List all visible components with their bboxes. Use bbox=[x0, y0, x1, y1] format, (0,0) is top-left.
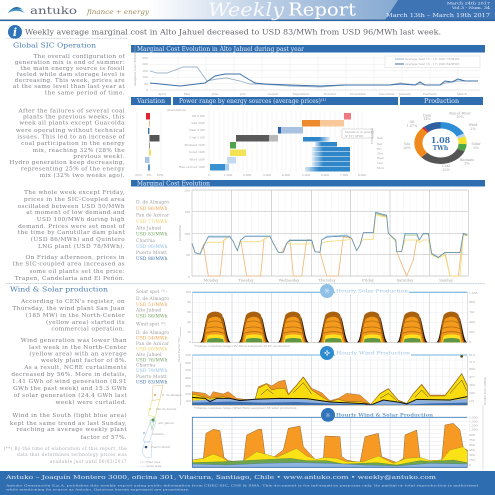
legend: plant factor by node: D. de Almagro bbox=[136, 297, 169, 302]
solar heading: Hourly Solar Production bbox=[336, 288, 408, 294]
range chart: 0 bbox=[208, 173, 210, 177]
line chart: August bbox=[267, 92, 279, 96]
panel: hourly solar production: 860 bbox=[469, 300, 475, 304]
panel: hourly wind production: 121 bbox=[469, 399, 475, 403]
legend: plant factor by node: D. de Almagro bbox=[136, 331, 169, 336]
text block: summary: fueled while dam storage level is bbox=[17, 72, 125, 78]
panel: marginal cost evolution weekly bbox=[131, 180, 485, 282]
text block: prices: the time by Canutillar dam plant bbox=[18, 230, 125, 236]
logo wordmark: antuko bbox=[30, 5, 77, 17]
panel: hourly solar production: 247 bbox=[469, 330, 475, 334]
line chart: nodal prices: Friday bbox=[362, 278, 375, 282]
range chart: Sun bbox=[377, 136, 383, 140]
panel: hourly wind production: 713 bbox=[469, 360, 475, 364]
range chart: 7,000 bbox=[340, 173, 348, 177]
text block: prices: (USD 86/MWh) and Quintero bbox=[31, 236, 125, 243]
text block: coal and hydro: plants the previous weeks, this bbox=[23, 114, 125, 120]
range chart: 1,000 bbox=[224, 173, 232, 177]
legend: plant factor by node: USD 54/MWh bbox=[136, 336, 168, 342]
chart legend bbox=[385, 56, 480, 68]
range chart: Tue bbox=[377, 161, 383, 165]
donut labels: 2% bbox=[470, 127, 476, 131]
panel: hourly wind production: 366 bbox=[469, 383, 475, 387]
headline with info icon bbox=[8, 25, 441, 39]
line chart: nodal prices bbox=[178, 188, 468, 282]
text block: friday: some oil plants set the price: bbox=[29, 269, 125, 275]
footer contact line: Antuko – Joaquín Montero 3000, oficina 301, Vitacura, Santiago, Chile • www.antuko.com • weekly@antuko.com bbox=[5, 474, 437, 481]
panel: hourly solar production: 100 bbox=[185, 290, 191, 294]
heading bar bbox=[131, 45, 485, 53]
range chart: Dam 3 kW bbox=[189, 128, 206, 132]
text block: prices: demand. Prices were set most of bbox=[18, 224, 125, 230]
panel: variation bbox=[131, 97, 171, 177]
callout bbox=[342, 129, 374, 138]
line chart: June bbox=[211, 92, 219, 96]
text block: summary: generation mix is end of summer: bbox=[15, 60, 125, 66]
line chart: nodal prices: USD/MWh bbox=[178, 225, 182, 241]
line chart: February bbox=[423, 92, 437, 96]
legend: nodes: Pan de Azúcar bbox=[136, 212, 170, 218]
line chart: December bbox=[379, 92, 395, 96]
text block: coal and hydro: mix, reaching 32% (28% the bbox=[33, 147, 125, 154]
range chart: Wind 1kW bbox=[189, 158, 206, 162]
text block: prices: at moment of low demand and bbox=[26, 210, 125, 216]
text block: coal and hydro: week all plants except Guacolda bbox=[19, 120, 125, 126]
donut labels: Biomass bbox=[460, 158, 474, 162]
panel: global SIC operation text bbox=[6, 38, 128, 282]
line chart: Marginal Cost (USD/MWh) bbox=[133, 45, 137, 86]
range chart: 4,000 bbox=[282, 173, 290, 177]
text block: summary bbox=[13, 54, 125, 96]
line chart: nodal prices: Tuesday bbox=[238, 278, 255, 282]
range chart: Solar 1kW bbox=[189, 150, 206, 154]
line chart: nodal prices: 0 bbox=[188, 275, 190, 279]
wind heading bbox=[320, 346, 411, 360]
line chart: nodal prices: 200 bbox=[184, 188, 190, 192]
footer disclaimer: Antuko Generación S.p.A. publishes this weekly report using public information from CDEC-SIC, CNE & SMA. This document is for information purposes only. Its partial or total reproduction is authorized bbox=[4, 484, 478, 488]
panel: hourly wind production: 600 bbox=[185, 361, 191, 365]
footer disclaimer: while mentioning its source as Antuko. Opinions herein expressed are proprietary. bbox=[6, 488, 189, 492]
range chart: Fri bbox=[377, 147, 382, 151]
text block: coal and hydro: previous week). bbox=[73, 153, 125, 160]
donut chart bbox=[418, 125, 463, 161]
text block: new plant: (185 MW) in the North-Center bbox=[26, 312, 125, 319]
chart legend: Average Year 16 - 17: USD 84/MWh bbox=[404, 62, 460, 66]
combined heading: ☼ bbox=[325, 412, 331, 420]
line chart: March bbox=[457, 92, 467, 96]
text block: new plant: Thursday, the wind plant San Juan bbox=[12, 306, 125, 312]
map of Chile by area: D. de Almagro bbox=[162, 393, 183, 397]
text block: curtailments: of solar generation (24.4 GWh last bbox=[14, 392, 127, 399]
legend: nodes: USD 86/MWh bbox=[136, 207, 168, 212]
tagline: finance + energy bbox=[86, 9, 149, 16]
heading bar bbox=[173, 97, 398, 105]
donut labels: Coal bbox=[442, 164, 450, 168]
line chart: nodal prices: Sunday bbox=[439, 278, 454, 282]
header banner bbox=[0, 0, 495, 21]
text block: new plant: commercial operation. bbox=[51, 326, 125, 332]
legend: plant factor by node: USD 51/MWh bbox=[136, 303, 168, 308]
line chart: nodal prices: Monday bbox=[204, 278, 219, 282]
panel: hourly solar production: 0 bbox=[469, 340, 471, 344]
line chart: 200 bbox=[142, 62, 148, 66]
text block: new plant: (yellow area) started its bbox=[46, 319, 125, 326]
map of Chile by area: Pan de Azúcar bbox=[156, 406, 177, 411]
text block: south wind: factor of 57%. bbox=[81, 435, 127, 441]
donut labels: Solar bbox=[471, 142, 481, 146]
callout: Variation of energy bbox=[344, 130, 374, 134]
panel: hourly wind and solar production: 150 bbox=[469, 458, 475, 462]
text block: curtailments: GWh the past week) and 15.3 GWh bbox=[13, 385, 127, 392]
range chart: Wed bbox=[377, 156, 384, 160]
panel: hourly wind and solar production: 450 bbox=[469, 448, 475, 452]
text block: coal and hydro: were operating without technical bbox=[16, 128, 125, 134]
line chart bbox=[133, 45, 480, 96]
legend: nodes bbox=[135, 200, 170, 262]
range chart: Biomass 1kW bbox=[185, 143, 206, 147]
legend: plant factor by node: Alto Jahuel bbox=[135, 308, 162, 314]
donut labels: 1.07% bbox=[407, 124, 418, 128]
report dates: March 13th – March 19th 2017 bbox=[386, 13, 491, 19]
text block: curtailments bbox=[11, 365, 127, 406]
range chart: Thu bbox=[377, 152, 383, 156]
line chart: November bbox=[350, 92, 366, 96]
legend: nodes: Puerto Montt bbox=[136, 251, 167, 256]
legend: nodes: USD 77/MWh bbox=[136, 220, 168, 225]
legend: nodes: Charrúa bbox=[136, 238, 155, 244]
range chart: 8,000 bbox=[358, 173, 366, 177]
text block: coal and hydro: Hydro generation keep decreasing, bbox=[9, 160, 125, 166]
panel: hourly wind production: 300 bbox=[185, 384, 191, 388]
legend: plant factor by node: Wind spot ⁽²⁾: bbox=[136, 322, 167, 328]
combined heading: Hourly Wind & Solar Production bbox=[336, 412, 434, 418]
line chart: nodal prices: Wednesday bbox=[279, 278, 300, 282]
donut labels: 19% bbox=[456, 115, 465, 119]
legend: plant factor by node: Charrúa bbox=[136, 362, 155, 368]
line chart: 100 bbox=[142, 75, 148, 79]
callout: & 127 MWh bbox=[345, 134, 363, 138]
text block: coal and hydro: coal participation in the energy bbox=[21, 141, 125, 147]
text block: friday bbox=[13, 255, 125, 282]
line chart: nodal prices: 50 bbox=[186, 253, 190, 257]
donut labels: Dam bbox=[423, 114, 432, 118]
panel: wind and solar text bbox=[4, 286, 127, 464]
map of Chile by area: Alto Jahuel bbox=[157, 421, 174, 425]
panel: hourly wind production: 400 bbox=[185, 376, 191, 380]
panel: hourly wind and solar production: 750 bbox=[469, 438, 475, 442]
panel: marginal cost Alto Jahuel bbox=[131, 45, 485, 96]
donut labels: 3% bbox=[473, 146, 479, 150]
donut labels: 3% bbox=[464, 162, 470, 166]
legend: nodes: USD 88/MWh bbox=[136, 257, 168, 262]
text block: summary: The overall configuration of bbox=[33, 54, 125, 60]
legend: plant factor by node: Alto Jahuel bbox=[135, 353, 162, 358]
panel: hourly wind and solar production bbox=[192, 405, 483, 470]
panel: hourly wind and solar production: 0 bbox=[469, 463, 471, 467]
panel: hourly solar production bbox=[185, 284, 478, 348]
panel: hourly wind and solar production: 1,500 bbox=[469, 416, 478, 420]
range chart: USD/MWh bbox=[370, 128, 374, 144]
variation bar chart: 50% bbox=[157, 173, 163, 177]
line chart: 0 bbox=[146, 88, 148, 92]
panel: hourly wind production: 500 bbox=[185, 368, 191, 372]
line chart: January bbox=[398, 92, 411, 96]
report title bbox=[208, 0, 357, 21]
text block: south wind bbox=[10, 412, 127, 441]
line chart: 50 bbox=[144, 82, 148, 86]
text block: friday: On Friday afternoon, prices in bbox=[26, 255, 125, 261]
legend: plant factor by node bbox=[135, 289, 170, 386]
map of Chile by area bbox=[140, 385, 183, 468]
report dates: March 24th 2017 bbox=[447, 0, 491, 6]
panel: hourly solar production: 494 bbox=[469, 320, 475, 324]
text block: curtailments: 1.41 GWh of wind generation (8.91 bbox=[12, 378, 127, 385]
footnote: data that determines technology prices was bbox=[17, 452, 127, 457]
text block: new plant bbox=[12, 299, 125, 332]
variation bar chart: -50% bbox=[134, 173, 142, 177]
panel: hourly wind production: 814 bbox=[469, 353, 475, 357]
range chart: 6,000 bbox=[321, 173, 329, 177]
range chart bbox=[167, 108, 384, 177]
text block: friday: Trapen, Candelaria and El Peñón. bbox=[15, 275, 125, 282]
solar heading: ☼ bbox=[324, 288, 330, 296]
area chart: solar bbox=[192, 292, 467, 342]
area chart: combined bbox=[192, 417, 467, 467]
range chart: Sat bbox=[377, 142, 383, 146]
text block: coal and hydro bbox=[9, 108, 125, 179]
range chart: 2,000 bbox=[243, 173, 251, 177]
axis labels: Plant Factor [%] bbox=[177, 337, 181, 362]
map of Chile by area: —— Solar area bbox=[140, 464, 162, 468]
legend: plant factor by node: Pan de Azúcar bbox=[136, 341, 170, 347]
legend: plant factor by node: USD 60/MWh bbox=[136, 348, 168, 352]
icon: antuko logo bbox=[8, 7, 25, 13]
line chart: April bbox=[157, 92, 166, 96]
panel: hourly wind production: 477 bbox=[469, 375, 475, 379]
donut total: TWh bbox=[433, 145, 449, 152]
text block: prices: oscillated between USD 50/MWh bbox=[18, 204, 125, 210]
wind note: *Charge complete range (Wind Farm assigned) 36 wind production bbox=[194, 406, 296, 410]
text block: south wind: kept the same trend as last Sunday, bbox=[10, 421, 127, 427]
range chart: Run-of-river 1kW bbox=[179, 165, 206, 169]
text block: prices: prices in the SIC-Coupled area bbox=[24, 197, 125, 203]
donut labels: Oil bbox=[410, 120, 414, 124]
donut total: 1.08 bbox=[431, 135, 451, 145]
donut labels: Gas bbox=[404, 142, 410, 146]
text block: prices bbox=[18, 190, 125, 250]
text block: curtailments: week) were curtailed. bbox=[56, 399, 127, 406]
heading bar: Marginal Cost Evolution in Alto Jahuel during past year bbox=[137, 46, 304, 53]
chart legend: Average Year 15 - 16: USD 75/MWh bbox=[404, 57, 460, 61]
heading bar: Power range by energy sources (average prices)⁽¹⁾ bbox=[179, 98, 326, 105]
combined heading bbox=[321, 408, 434, 422]
text block: wind generation: (yellow area) with an average bbox=[29, 350, 127, 358]
text block: prices: LNG plant (USD 78/MWh). bbox=[38, 243, 125, 250]
heading: Wind & Solar production bbox=[10, 286, 109, 294]
axis labels: Production [MWh] bbox=[483, 377, 487, 405]
footnote: available just until 06/03/2017 bbox=[50, 459, 127, 464]
text block: friday: the SIC-coupled area increased as bbox=[13, 262, 125, 268]
footnote bbox=[4, 446, 127, 464]
report dates: Vol.3 - Num. 34 bbox=[451, 5, 491, 10]
donut labels: 26% bbox=[403, 146, 412, 150]
footnote: (**) By the time of elaboration of this report, the bbox=[4, 446, 127, 451]
text block: coal and hydro: After the failures of several coal bbox=[18, 108, 125, 114]
panel: hourly wind production: 700 bbox=[185, 353, 191, 357]
range chart: Coal 5 kW bbox=[189, 136, 206, 140]
divider bbox=[6, 282, 485, 284]
variation bar chart: 0% bbox=[147, 173, 152, 177]
donut labels: Run-of-River bbox=[449, 112, 471, 116]
heading bar: Marginal Cost Evolution bbox=[137, 180, 210, 188]
text block: prices: USD 100/MWh during high bbox=[37, 217, 125, 223]
line chart: July bbox=[239, 92, 246, 96]
heading: Global SIC Operation bbox=[13, 42, 97, 50]
legend: plant factor by node: Solar spot ⁽²⁾: bbox=[136, 289, 167, 295]
legend: nodes: USD 90/MWh bbox=[136, 245, 168, 250]
panel: hourly solar production: 1,035 bbox=[469, 291, 478, 295]
text block: coal and hydro: representing 25% of the energy bbox=[21, 166, 125, 172]
text block: wind generation bbox=[21, 338, 127, 364]
panel: hourly wind and solar production: 1,050 bbox=[469, 428, 478, 432]
range chart: 3,000 bbox=[263, 173, 271, 177]
panel: hourly wind production: 100 bbox=[185, 399, 191, 403]
legend: nodes: D. de Almagro bbox=[136, 200, 169, 206]
legend: plant factor by node: USD 79/MWh bbox=[136, 369, 168, 374]
wind heading: Hourly Wind Production bbox=[336, 350, 410, 356]
icon: info bbox=[8, 25, 22, 39]
panel: hourly wind production: 200 bbox=[185, 392, 191, 396]
legend: plant factor by node: USD 76/MWh bbox=[136, 358, 168, 364]
panel: hourly solar production: 80 bbox=[187, 300, 191, 304]
map of Chile by area: Charrúa bbox=[152, 431, 164, 436]
range chart: (Generation) bbox=[167, 108, 186, 112]
text block: summary: decreasing. This week, prices are bbox=[15, 78, 125, 84]
line chart: 250 bbox=[142, 56, 148, 60]
line chart: September bbox=[293, 92, 310, 96]
line chart: nodal prices: 100 bbox=[184, 232, 190, 236]
footer bbox=[0, 471, 495, 495]
area chart: wind bbox=[192, 355, 467, 405]
headline text: Weekly average marginal cost in Alto Jahuel decreased to USD 83/MWh from USD 96/MWh last week. bbox=[25, 28, 441, 36]
wind heading: ✣ bbox=[324, 350, 330, 358]
range chart: 5,000 bbox=[302, 173, 310, 177]
range chart: Mon bbox=[377, 166, 384, 170]
panel: hourly wind production: 600 bbox=[469, 367, 475, 371]
text block: summary: at the same level than last year at bbox=[13, 84, 125, 90]
text block: south wind: reaching an average weekly plant bbox=[16, 427, 127, 433]
legend: nodes: Alto Jahuel bbox=[135, 226, 162, 232]
donut labels bbox=[403, 112, 481, 172]
solar note: *Charge complete range (PV Farm assigned) 36 PV production bbox=[194, 344, 290, 348]
text block: coal and hydro: issues. This led to an increase of bbox=[17, 134, 125, 140]
line chart: nodal prices: Thursday bbox=[318, 278, 337, 282]
axis labels bbox=[177, 327, 487, 405]
solar heading bbox=[320, 284, 409, 298]
report title: Report bbox=[288, 0, 357, 20]
legend: plant factor by node: USD 83/MWh bbox=[136, 380, 168, 386]
text block: curtailments: As a result, NCRE curtailments bbox=[23, 365, 127, 371]
line chart: nodal prices: Saturday bbox=[397, 278, 414, 282]
icon: info: i bbox=[13, 26, 17, 39]
heading bar: Variation bbox=[136, 98, 165, 105]
line chart: nodal prices: 150 bbox=[184, 210, 190, 214]
range chart: Gas 5kW bbox=[192, 121, 206, 125]
range chart: Oil 0 kW bbox=[192, 114, 206, 118]
legend: nodes: USD 83/MWh bbox=[136, 232, 168, 238]
panel: hourly solar production: 0 bbox=[189, 340, 191, 344]
text block: south wind: Wind in the South (light blue area) bbox=[12, 412, 127, 419]
panel: hourly wind and solar production: 900 bbox=[469, 433, 475, 437]
panel: hourly wind production bbox=[177, 327, 487, 410]
donut labels: 14% bbox=[423, 117, 432, 121]
heading bar bbox=[131, 180, 485, 188]
text block: new plant: According to CEN's register, on bbox=[20, 299, 125, 305]
panel: hourly wind production: 246 bbox=[469, 391, 475, 395]
legend: plant factor by node: Puerto Montt bbox=[136, 375, 167, 380]
legend: plant factor by node: USD 88/MWh bbox=[136, 314, 168, 320]
panel: hourly wind and solar production: 1,200 bbox=[469, 424, 478, 428]
text block: wind generation: weekly plant factor of 8%. bbox=[41, 358, 127, 364]
map of Chile by area: Puerto Montt bbox=[151, 445, 171, 449]
panel: production bbox=[400, 97, 483, 172]
line chart: October bbox=[324, 92, 337, 96]
panel: hourly wind and solar production: 600 bbox=[469, 443, 475, 447]
panel: hourly solar production: 40 bbox=[187, 320, 191, 324]
panel: power range by energy source bbox=[167, 97, 398, 177]
panel: hourly solar production: 741 bbox=[469, 310, 475, 314]
donut labels: 32% bbox=[442, 168, 451, 172]
text block: coal and hydro: mix (32% two weeks ago). bbox=[40, 172, 125, 179]
report dates bbox=[386, 0, 491, 19]
variation bar chart bbox=[134, 112, 163, 177]
panel: hourly solar production: 60 bbox=[187, 310, 191, 314]
line chart: May bbox=[184, 92, 191, 96]
panel: hourly wind and solar production: 300 bbox=[469, 453, 475, 457]
text block: curtailments: decreased by 56%. More in details, bbox=[11, 372, 127, 378]
text block: summary: the same period of time. bbox=[45, 90, 125, 96]
text block: summary: the main energy source is fossil bbox=[20, 66, 125, 72]
donut total bbox=[431, 135, 451, 152]
text block: prices: The whole week except Friday, bbox=[24, 190, 125, 196]
footer disclaimer bbox=[4, 484, 478, 492]
line chart: 150 bbox=[142, 69, 148, 73]
text block: wind generation: Wind generation was lower than bbox=[21, 338, 127, 344]
panel: hourly wind and solar production: 1,350 bbox=[469, 420, 478, 424]
text block: wind generation: last week in the North-Center bbox=[29, 345, 127, 351]
panel: hourly solar production: 20 bbox=[187, 330, 191, 334]
heading bar: Production bbox=[424, 98, 459, 105]
price range bars bbox=[303, 137, 350, 172]
donut labels: Wind bbox=[469, 123, 478, 127]
map of Chile by area: ••• Wind area bbox=[140, 460, 161, 464]
